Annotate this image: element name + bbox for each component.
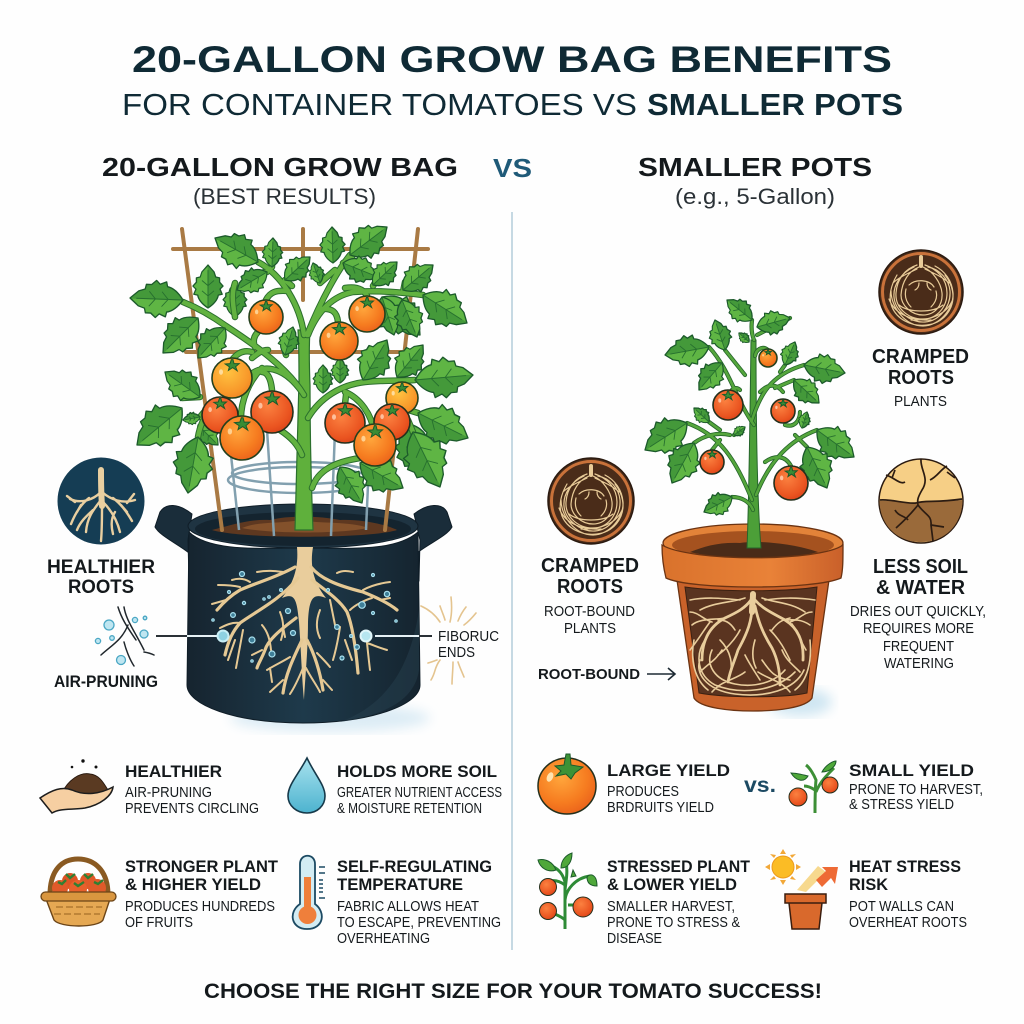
foliage [124,214,477,511]
label: less soil and water: DRIES OUT QUICKLY, [850,604,986,620]
benefit: self-regulating temperature: TO ESCAPE, PREVENTING [337,915,501,931]
icon: tomato basket [41,859,116,926]
label: less soil and water: WATERING [884,656,954,672]
comparison: small yield: PRONE TO HARVEST, [849,782,983,798]
benefit: stronger plant: STRONGER PLANT [125,857,279,876]
label: less soil and water: LESS SOIL [873,556,968,578]
icon: stressed plant [538,853,597,929]
callout lines [156,630,432,642]
label: cramped roots left: ROOTS [557,576,623,598]
foliage [636,291,863,522]
benefit: self-regulating temperature: SELF-REGULATING [337,857,492,876]
main stem [295,330,313,530]
icon: air pruning [95,607,154,666]
heading: grow bag column [102,152,458,209]
label: cramped roots left: ROOT-BOUND [544,604,635,620]
comparison: large yield: BRDRUITS YIELD [607,800,714,816]
tangled roots [690,594,815,695]
branches [182,250,423,488]
icon: cramped roots left [548,458,634,544]
comparison: heat stress: HEAT STRESS [849,857,961,876]
bag interior and soil [188,504,418,548]
icon: sun, heat arrow and pot [765,849,838,929]
label: cramped roots left [541,555,639,637]
heading: smaller pots column: (e.g., 5-Gallon) [675,184,835,209]
comparison: large yield [607,761,730,816]
comparison: stressed plant: & LOWER YIELD [607,875,737,894]
benefit: stronger plant: OF FRUITS [125,915,193,931]
benefit: self-regulating temperature: OVERHEATING [337,931,430,947]
wooden trellis [173,229,428,530]
icon: small plant [789,761,838,813]
leaves behind stems [191,283,444,484]
heading: smaller pots column: SMALLER POTS [638,152,872,182]
illustration: grow bag with tomato plant [124,214,477,732]
heading: VS: VS [493,153,532,183]
icon: fibrous root burst [421,597,476,684]
stem [747,340,761,548]
label: less soil and water: FREQUENT [883,639,954,655]
icon: water drop [288,758,325,813]
heading: smaller pots column [638,152,872,209]
vs marker: vs. [744,774,776,797]
comparison: stressed plant: DISEASE [607,931,662,947]
wire cage [228,430,372,536]
label: cramped roots top: CRAMPED [872,346,969,368]
tomatoes [202,296,418,466]
footer call to action: CHOOSE THE RIGHT SIZE FOR YOUR TOMATO SUCCESS! [204,980,822,1003]
label: fibrous ends: ENDS [438,644,475,661]
benefit: holds more soil [337,762,502,817]
label: air-pruning: AIR-PRUNING [54,672,158,691]
soil window [685,587,817,697]
label: fibrous ends: FIBORUC [438,628,499,645]
title: SMALLER POTS [647,87,903,122]
label: less soil and water: & WATER [876,577,966,599]
heading: grow bag column: 20-GALLON GROW BAG [102,152,458,182]
benefit: healthier: PREVENTS CIRCLING [125,801,259,817]
roots [212,547,397,700]
label: healthier roots: HEALTHIER [47,557,155,578]
comparison: large yield: PRODUCES [607,784,679,800]
label: fibrous ends [438,628,499,661]
benefit: self-regulating temperature: TEMPERATURE [337,875,463,894]
branches [687,318,817,510]
benefit: healthier: AIR-PRUNING [125,785,212,801]
benefit: holds more soil: & MOISTURE RETENTION [337,801,482,817]
comparison: small yield: & STRESS YIELD [849,797,954,813]
air and water bubbles [212,572,397,662]
icon: thermometer [293,856,325,929]
comparison: heat stress: RISK [849,875,889,894]
label: cramped roots left: CRAMPED [541,555,639,577]
comparison: stressed plant: PRONE TO STRESS & [607,915,740,931]
icon: cramped roots top [879,250,963,334]
label: healthier roots: ROOTS [68,577,134,598]
title: FOR CONTAINER TOMATOES VS [122,87,637,122]
benefit: self-regulating temperature: FABRIC ALLOWS HEAT [337,899,479,915]
bag handles [155,505,452,585]
bag front [187,532,420,723]
comparison: stressed plant: STRESSED PLANT [607,857,751,876]
label: root-bound with arrow: ROOT-BOUND [538,666,640,683]
benefit: stronger plant: PRODUCES HUNDREDS [125,899,275,915]
icon: large tomato [538,754,596,814]
title: 20-GALLON GROW BAG BENEFITS [132,39,892,80]
label: healthier roots [47,557,155,598]
comparison: heat stress [849,857,967,931]
label: less soil and water [850,556,986,672]
benefit: healthier: HEALTHIER [125,762,222,781]
icon: healthy root badge [58,458,144,544]
benefit: healthier [125,762,259,817]
benefit: holds more soil: HOLDS MORE SOIL [337,762,497,781]
rear rim and soil [663,524,843,562]
comparison: large yield: LARGE YIELD [607,761,730,780]
comparison: heat stress: POT WALLS CAN [849,899,954,915]
label: cramped roots top [872,346,969,410]
benefit: self-regulating temperature [337,857,501,947]
tomatoes [700,349,808,500]
comparison: small yield: SMALL YIELD [849,761,974,780]
comparison: stressed plant: SMALLER HARVEST, [607,899,735,915]
title [122,39,903,122]
rim band [662,545,843,587]
icon: dry cracked soil [879,459,963,543]
comparison: stressed plant [607,857,751,947]
label: cramped roots top: ROOTS [888,367,954,389]
label: cramped roots left: PLANTS [564,621,616,637]
illustration: small pot with tomato plant [636,291,863,716]
icon: hand with soil [40,759,113,813]
comparison: heat stress: OVERHEAT ROOTS [849,915,967,931]
benefit: stronger plant: & HIGHER YIELD [125,875,261,894]
heading: grow bag column: (BEST RESULTS) [193,184,376,209]
label: less soil and water: REQUIRES MORE [863,621,974,637]
benefit: stronger plant [125,857,279,931]
comparison: small yield [849,761,983,813]
benefit: holds more soil: GREATER NUTRIENT ACCESS [337,785,502,801]
pot body [677,580,829,711]
label: cramped roots top: PLANTS [894,394,947,410]
